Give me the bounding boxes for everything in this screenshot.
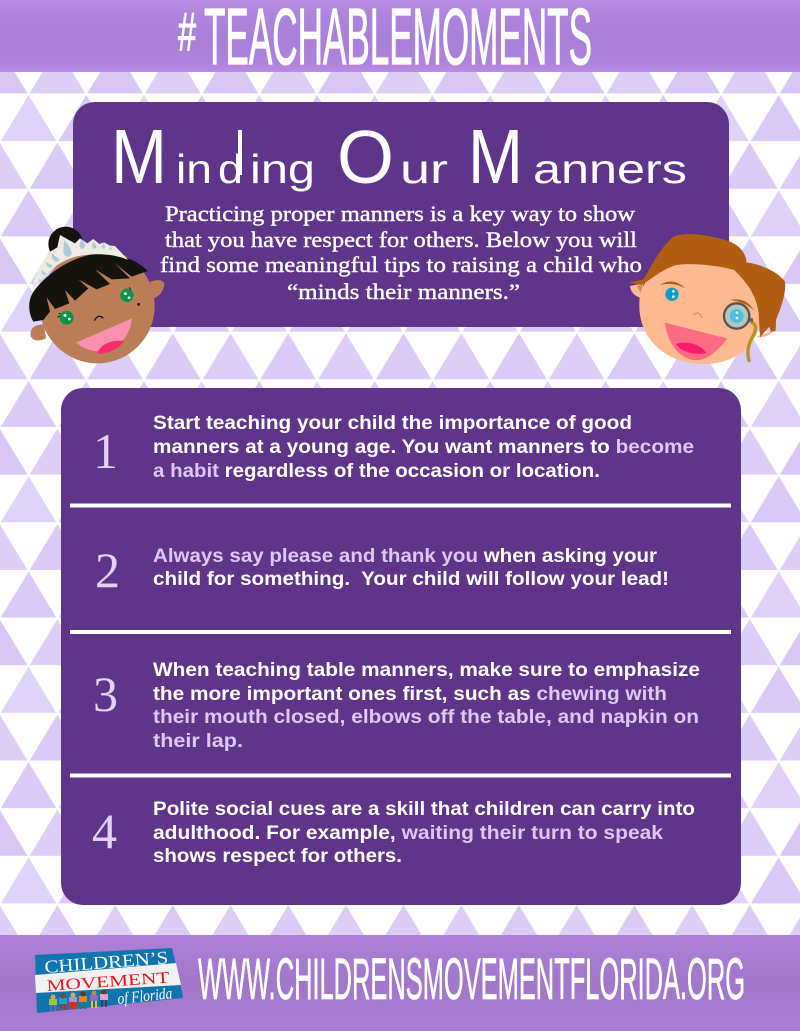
header hashtag [178,0,592,81]
title: O [337,115,394,199]
intro text: Practicing proper manners is a key way to show [165,201,635,226]
intro text: “minds their manners.” [287,279,520,304]
logo: Children's Movement of Florida [35,947,183,1013]
tip 3: When teaching table manners, make sure to emphasize [153,659,700,681]
tip 1: Start teaching your child the importance of good [153,412,632,434]
panel: tips [61,388,741,905]
logo: Children's Movement of Florida: of Florida [117,985,173,1008]
intro text: find some meaningful tips to raising a child who [160,252,642,277]
tip 4: 4 [92,803,117,859]
tip 1: manners at a young age. You want manners to become [153,436,694,458]
tip 1: 1 [93,423,118,479]
panel: intro [73,102,729,327]
tip 4 [92,798,695,867]
header band [0,0,800,81]
title [111,114,687,200]
intro text: that you have respect for others. Below you will [165,227,637,252]
title: ing [250,146,315,192]
tip 3: their lap. [153,730,243,752]
title: ur [400,146,448,192]
title: d [218,146,243,192]
icon: monocle boy face [628,234,785,364]
tip 3: their mouth closed, elbows off the table, and napkin on [153,706,699,728]
tip 3: the more important ones first, such as chewing with [153,683,667,705]
tip 4: Polite social cues are a skill that children can carry into [153,798,695,820]
tip 2: child for something. Your child will follow your lead! [153,568,669,590]
tip 3 [93,659,700,752]
tip 1: a habit regardless of the occasion or location. [153,460,600,482]
tip 2 [95,542,669,598]
tip 2: Always say please and thank you when asking your [153,545,657,567]
intro text [160,201,642,304]
monocle [724,303,755,361]
logo: Children's Movement of Florida: MOVEMENT [46,969,170,995]
title: in [176,146,212,192]
footer band [0,935,800,1031]
title: M [111,114,167,200]
icon: princess girl face [29,227,164,363]
children figures [49,990,108,1011]
title: anners [533,146,687,192]
tip 2: 2 [95,542,120,598]
logo: Children's Movement of Florida: CHILDREN’S [44,947,169,977]
tip 4: adulthood. For example, waiting their turn to speak [153,822,663,844]
tip 4: shows respect for others. [153,845,402,867]
tip 1 [93,412,694,482]
header hashtag: # [178,2,196,62]
tip 3: 3 [93,666,118,722]
title: M [468,114,523,200]
